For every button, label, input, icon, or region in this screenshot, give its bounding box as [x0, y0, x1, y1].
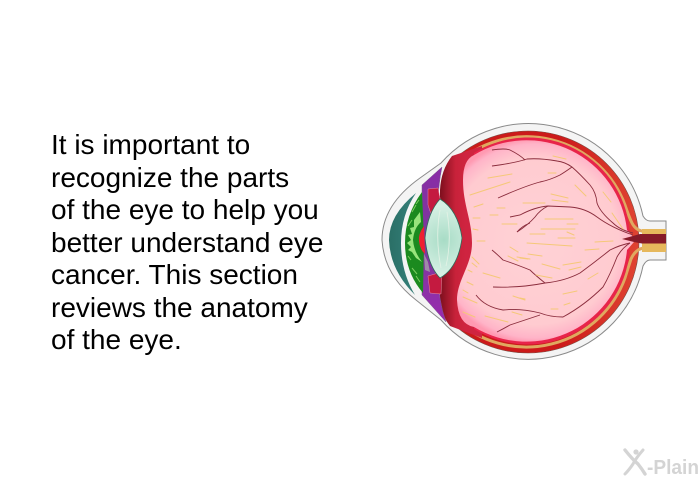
optic nerve — [622, 229, 666, 252]
retinal blood vessels — [476, 149, 633, 332]
text block: introduction: of the eye to help you — [51, 194, 319, 225]
text block: introduction: recognize the parts — [51, 162, 289, 192]
red retinal edge — [474, 137, 630, 345]
text block: introduction: reviews the anatomy — [51, 292, 308, 322]
logo figure — [625, 449, 645, 474]
text block: introduction: of the eye. — [51, 324, 182, 355]
text block: introduction — [51, 129, 323, 355]
orange scleral band bottom — [456, 248, 645, 347]
cornea teal — [389, 193, 416, 295]
orange scleral band top — [456, 137, 645, 232]
iris green — [405, 192, 424, 293]
vitreous pink — [457, 140, 634, 342]
lens — [425, 199, 462, 278]
logo wordmark: -Plain — [647, 457, 699, 479]
grey iris edge — [424, 254, 430, 272]
purple sclera front — [422, 167, 446, 322]
logo: X-Plain — [625, 449, 699, 479]
ciliary muscle top — [428, 188, 441, 214]
ciliary muscle bottom — [428, 272, 442, 294]
illustration: eye cross-section — [382, 124, 666, 359]
text block: introduction: It is important to — [51, 129, 250, 160]
retinal yellow streaks — [463, 156, 623, 322]
ciliary body crimson — [440, 146, 482, 338]
text block: introduction: better understand eye — [51, 226, 323, 258]
text block: introduction: cancer. This section — [51, 259, 298, 290]
choroid red layer — [450, 131, 639, 353]
pupil red — [419, 226, 425, 254]
sclera outer shell — [382, 124, 666, 359]
